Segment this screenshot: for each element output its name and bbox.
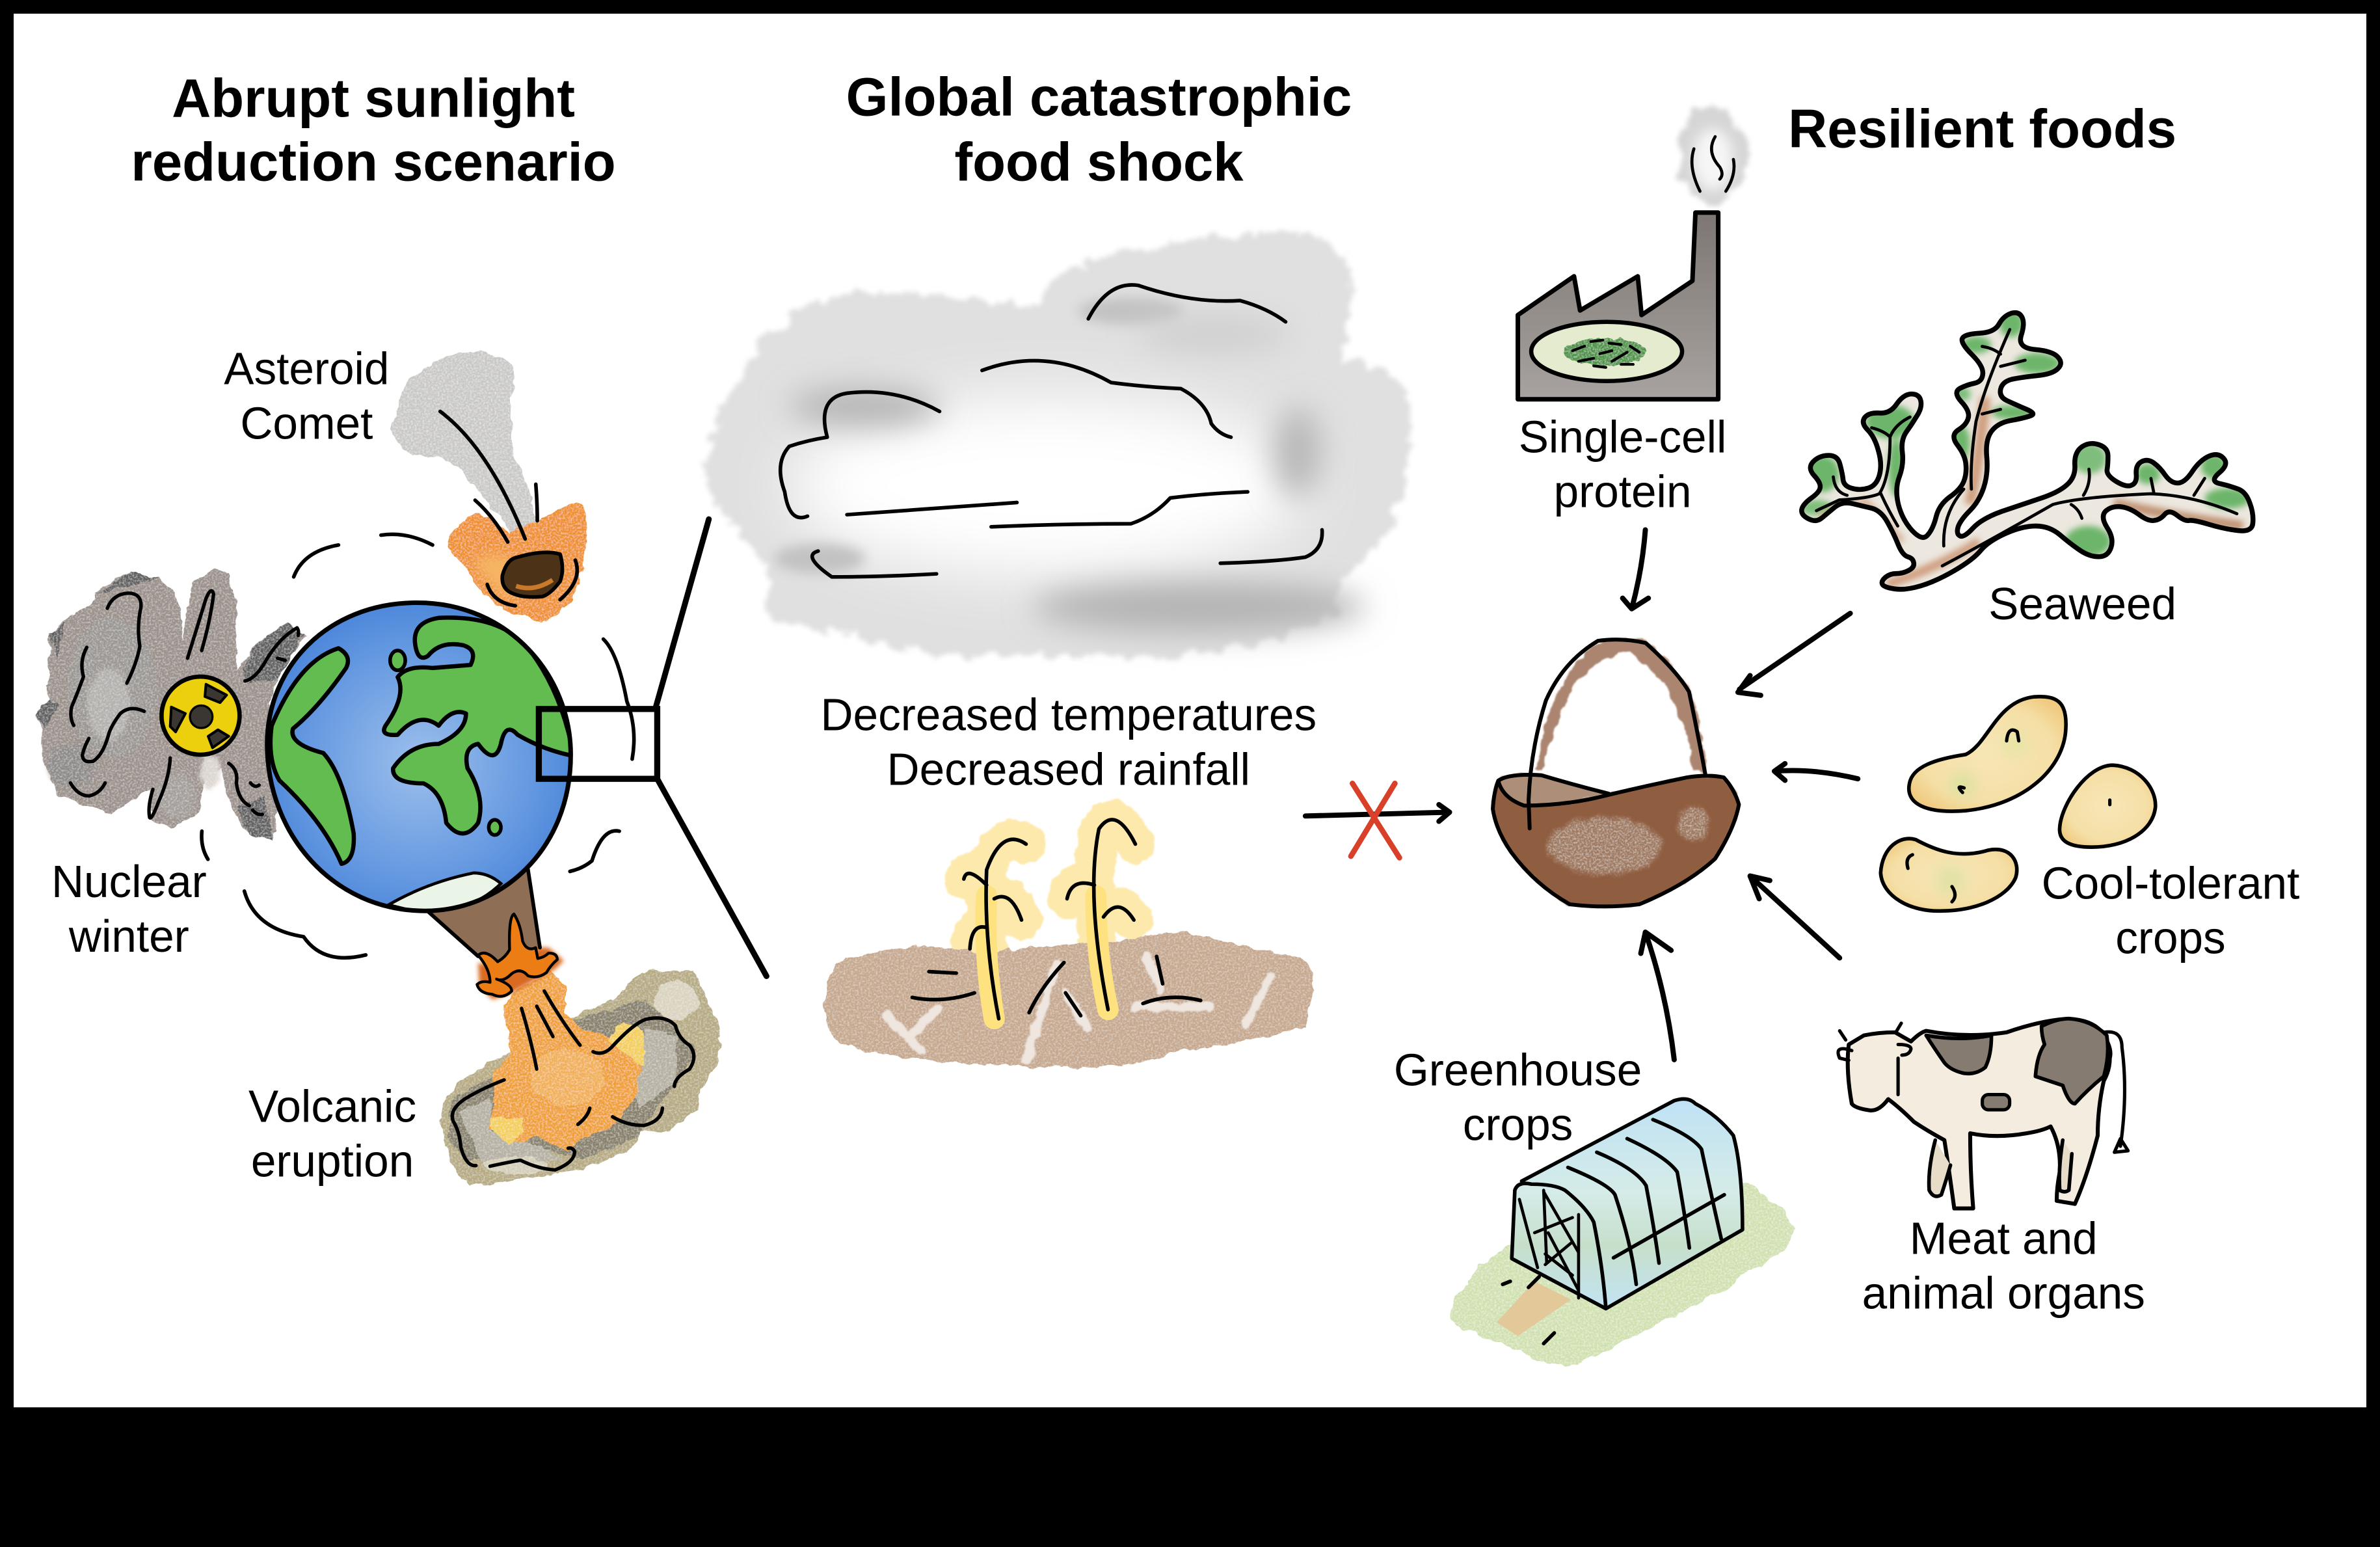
icon: greenhouse	[1450, 1099, 1796, 1368]
dry soil	[825, 932, 1313, 1068]
arrow: seaweed to basket	[1738, 613, 1851, 695]
label: cool-tolerant crops: crops	[2115, 913, 2226, 963]
volcanic eruption	[425, 870, 720, 1186]
label: meat and animal organs: Meat and	[1910, 1213, 2098, 1264]
panel: sunlight reduction scenarios	[36, 343, 766, 1187]
title: abrupt sunlight reduction scenario: reduction scenario	[131, 132, 616, 193]
title: abrupt sunlight reduction scenario: Abrupt sunlight	[172, 68, 575, 129]
title: global catastrophic food shock: Global catastrophic	[846, 66, 1352, 127]
panel: food shock	[702, 234, 1450, 1068]
label: seaweed: Seaweed	[1988, 578, 2176, 629]
label: nuclear winter: winter	[68, 911, 189, 962]
icon: cow	[1838, 1019, 2128, 1209]
label: greenhouse crops: crops	[1463, 1099, 1573, 1150]
panel: resilient foods	[1394, 108, 2299, 1368]
motion squiggles	[202, 534, 634, 958]
arrow: single-cell protein to basket	[1623, 530, 1648, 609]
icon: basket	[1493, 638, 1739, 906]
label: decreased temperatures and rainfall: Decreased rainfall	[887, 744, 1250, 795]
label: single-cell protein: Single-cell	[1519, 411, 1726, 462]
icon: single-cell protein factory	[1518, 108, 1748, 399]
label: asteroid comet: Asteroid	[224, 343, 389, 394]
arrow: crops to basket	[1774, 764, 1858, 781]
nuclear winter cloud	[36, 568, 306, 839]
storm cloud	[702, 234, 1411, 657]
withered crops	[912, 820, 1201, 1019]
zoom box and connector lines	[539, 519, 766, 976]
withered crop halo	[964, 820, 1135, 1019]
label: volcanic eruption: Volcanic	[248, 1081, 416, 1132]
label: volcanic eruption: eruption	[251, 1136, 414, 1187]
title: resilient foods: Resilient foods	[1788, 98, 2176, 159]
label: greenhouse crops: Greenhouse	[1394, 1045, 1642, 1096]
arrow: greenhouse to basket	[1641, 932, 1674, 1060]
label: single-cell protein: protein	[1554, 466, 1692, 517]
arrow: animals to basket	[1750, 876, 1839, 958]
label: decreased temperatures and rainfall: Decreased temperatures	[821, 689, 1317, 740]
earth globe	[267, 602, 574, 914]
crossed out arrow	[1305, 783, 1450, 858]
icon: potatoes	[1880, 697, 2156, 911]
icon: radiation symbol	[161, 677, 239, 755]
label: nuclear winter: Nuclear	[51, 856, 207, 907]
title: global catastrophic food shock: food shock	[954, 132, 1244, 193]
label: asteroid comet: Comet	[240, 397, 373, 448]
icon: seaweed	[1799, 310, 2256, 592]
label: cool-tolerant crops: Cool-tolerant	[2042, 858, 2299, 909]
label: meat and animal organs: animal organs	[1862, 1268, 2145, 1319]
asteroid impact	[392, 352, 588, 621]
